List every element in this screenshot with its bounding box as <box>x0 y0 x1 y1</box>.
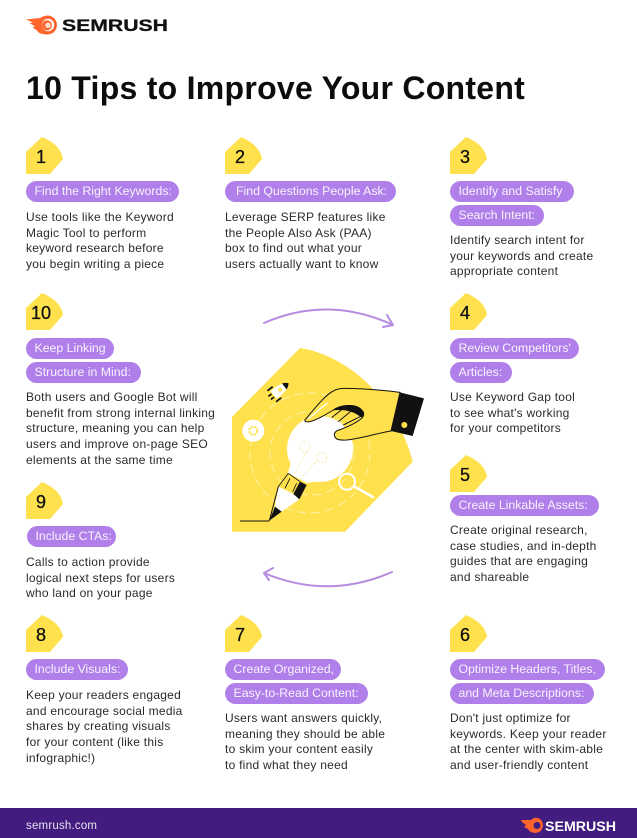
tip 2: Find Questions People Ask: <box>236 184 387 198</box>
tip 9: who land on your page <box>26 586 153 600</box>
tip 3: Identify search intent for <box>450 233 585 247</box>
icon: gear <box>242 420 264 442</box>
tip 8: for your content (like this <box>26 735 163 749</box>
tip 10: structure, meaning you can help <box>26 421 205 435</box>
tip 4: to see what's working <box>450 406 570 420</box>
tip 9 <box>26 482 175 600</box>
tip 2: Leverage SERP features like <box>225 210 386 224</box>
tip 10: Keep Linking <box>34 341 106 355</box>
tip 1: Use tools like the Keyword <box>26 210 174 224</box>
tip 8: Include Visuals: <box>34 662 120 676</box>
logo: Semrush header <box>26 16 168 35</box>
tip 8: infographic!) <box>26 751 95 765</box>
tip 10 <box>26 293 215 467</box>
tip 10: Both users and Google Bot will <box>26 390 198 404</box>
logo: Semrush footer <box>521 818 616 834</box>
tip 2 <box>225 137 396 271</box>
tip 7: Users want answers quickly, <box>225 711 382 725</box>
tip 8: 8 <box>36 625 46 645</box>
tip 5 <box>450 455 599 584</box>
tip 1: Find the Right Keywords: <box>34 184 172 198</box>
tip 6 <box>450 615 607 772</box>
icon: pencil <box>240 473 307 521</box>
logo: Semrush header: SEMRUSH <box>62 16 168 35</box>
title: 10 Tips to Improve Your Content <box>26 70 525 106</box>
logo: Semrush footer: SEMRUSH <box>545 819 616 834</box>
footer url: semrush.com <box>26 820 97 832</box>
tip 7 <box>225 615 385 772</box>
tip 5: case studies, and in-depth <box>450 539 597 553</box>
tip 3: Search Intent: <box>458 208 535 222</box>
tip 3: Identify and Satisfy <box>458 184 562 198</box>
tip 6: and user-friendly content <box>450 758 588 772</box>
tip 3 <box>450 137 593 278</box>
tip 6: Don't just optimize for <box>450 711 571 725</box>
icon: magnifying glass <box>339 474 373 497</box>
tip 5: Create Linkable Assets: <box>458 498 588 512</box>
tip 8: and encourage social media <box>26 704 183 718</box>
tip 6: and Meta Descriptions: <box>458 686 584 700</box>
icon: light bulb <box>287 416 353 483</box>
tip 9: Calls to action provide <box>26 555 150 569</box>
tip 10: users and improve on-page SEO <box>26 437 208 451</box>
dashed orbit rings <box>250 393 370 513</box>
tip 8: Keep your readers engaged <box>26 688 181 702</box>
tip 7: Easy-to-Read Content: <box>234 686 359 700</box>
tip 2: users actually want to know <box>225 257 378 271</box>
tip 10: 10 <box>31 303 51 323</box>
tip 6: Optimize Headers, Titles, <box>458 662 596 676</box>
tip 4 <box>450 293 579 435</box>
tip 3: your keywords and create <box>450 249 593 263</box>
tip 4: Use Keyword Gap tool <box>450 390 575 404</box>
tip 7: 7 <box>235 625 245 645</box>
tip 4: for your competitors <box>450 421 561 435</box>
tip 6: 6 <box>460 625 470 645</box>
tip 2: 2 <box>235 147 245 167</box>
tip 2: box to find out what your <box>225 241 362 255</box>
tip 8 <box>26 615 183 765</box>
tip 5: guides that are engaging <box>450 554 588 568</box>
tip 9: 9 <box>36 492 46 512</box>
tip 7: to skim your content easily <box>225 742 373 756</box>
arrow: bottom curved <box>264 568 392 586</box>
tip 1: 1 <box>36 147 46 167</box>
tip 6: keywords. Keep your reader <box>450 727 607 741</box>
arrow: top curved <box>264 309 393 327</box>
tip 1: Magic Tool to perform <box>26 226 146 240</box>
tip 5: 5 <box>460 465 470 485</box>
tip 7: meaning they should be able <box>225 727 385 741</box>
tip 1 <box>26 137 179 271</box>
tip 9: logical next steps for users <box>26 571 175 585</box>
footer bar <box>0 808 637 838</box>
tip 7: Create Organized, <box>234 662 334 676</box>
tip 5: and shareable <box>450 570 529 584</box>
tip 1: keyword research before <box>26 241 164 255</box>
tip 3: appropriate content <box>450 264 558 278</box>
yellow pentagon background <box>232 348 413 532</box>
tip 10: benefit from strong internal linking <box>26 406 215 420</box>
tip 4: Review Competitors' <box>458 341 571 355</box>
tip 7: to find what they need <box>225 758 348 772</box>
tip 5: Create original research, <box>450 523 588 537</box>
tip 4: 4 <box>460 303 470 323</box>
tip 2: the People Also Ask (PAA) <box>225 226 372 240</box>
tip 10: elements at the same time <box>26 453 173 467</box>
tip 4: Articles: <box>458 365 502 379</box>
tip 10: Structure in Mind: <box>34 365 131 379</box>
tip 3: 3 <box>460 147 470 167</box>
icon: hand holding bulb <box>305 388 424 440</box>
tip 8: shares by creating visuals <box>26 719 171 733</box>
tip 1: you begin writing a piece <box>26 257 164 271</box>
icon: rocket <box>265 378 293 403</box>
tip 9: Include CTAs: <box>36 529 112 543</box>
tip 6: at the center with skim-able <box>450 742 603 756</box>
